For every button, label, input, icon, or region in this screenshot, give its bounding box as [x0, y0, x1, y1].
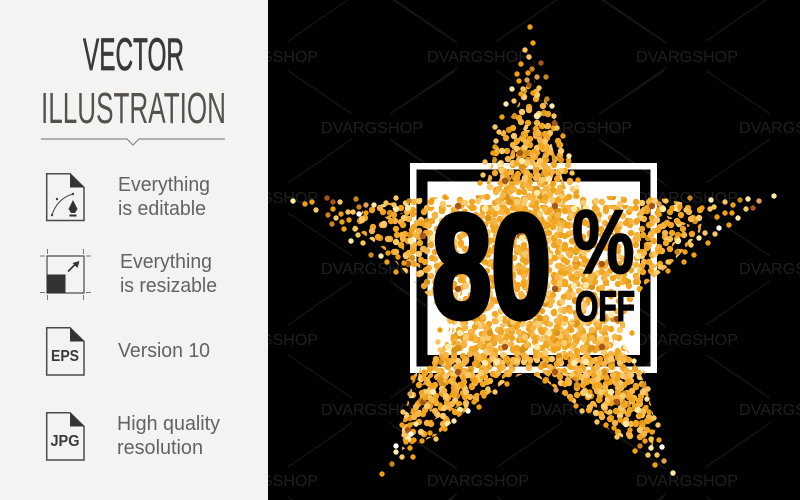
watermark: DVARGSHOP text: DVARGSHOP	[530, 120, 632, 137]
text: version 10: Version 10	[118, 339, 210, 362]
watermark: DVARGSHOP text: DVARGSHOP	[217, 473, 318, 490]
icon: resize square	[40, 249, 91, 300]
icon: JPG file	[47, 412, 84, 460]
watermark: DVARGSHOP text: DVARGSHOP	[530, 402, 632, 419]
headline: 80: 80	[432, 185, 551, 349]
gold glitter star	[280, 20, 787, 497]
text: everything is editable: Everything	[118, 173, 210, 196]
watermark: DVARGSHOP text: DVARGSHOP	[321, 261, 423, 278]
text: high quality resolution	[117, 412, 221, 459]
star tips: scattered dots	[293, 27, 774, 474]
watermark: DVARGSHOP text	[217, 49, 800, 490]
star centre band	[382, 205, 690, 290]
watermark: DVARGSHOP text: DVARGSHOP	[321, 120, 423, 137]
star body: glitter layers	[352, 80, 704, 450]
watermark: DVARGSHOP text: DVARGSHOP	[217, 332, 318, 349]
watermark lines	[268, 0, 800, 500]
title: ILLUSTRATION: ILLUSTRATION	[41, 84, 226, 133]
title: VECTOR: VECTOR	[83, 29, 184, 80]
watermark: DVARGSHOP text: DVARGSHOP	[217, 49, 318, 66]
star dense zones: layered glitter	[422, 130, 645, 415]
headline: OFF: OFF	[575, 283, 635, 331]
text: everything is resizable: is resizable	[120, 274, 217, 297]
star accents: brown and pale dots	[392, 101, 682, 442]
text: everything is resizable	[120, 250, 217, 297]
watermark: DVARGSHOP text: DVARGSHOP	[636, 473, 738, 490]
headline: percent sign: %	[572, 193, 634, 293]
text: everything is editable: is editable	[118, 197, 206, 220]
icon: editable file with pen	[47, 174, 84, 220]
panel: dark background	[268, 0, 800, 500]
watermark: DVARGSHOP text: DVARGSHOP	[427, 49, 529, 66]
icon: EPS file: EPS	[51, 348, 79, 365]
star core: denser glitter	[410, 125, 650, 425]
icon: EPS file	[47, 328, 84, 375]
watermark: DVARGSHOP text: DVARGSHOP	[427, 473, 529, 490]
text: high quality resolution: resolution	[117, 436, 203, 459]
text: everything is resizable: Everything	[120, 250, 212, 273]
text: everything is editable	[118, 173, 210, 220]
watermark: DVARGSHOP text: DVARGSHOP	[636, 190, 738, 207]
icon: JPG file: JPG	[50, 433, 80, 450]
watermark: DVARGSHOP text: DVARGSHOP	[636, 332, 738, 349]
text: high quality resolution: High quality	[117, 412, 221, 435]
divider with chevron	[41, 139, 225, 145]
white square frame	[410, 163, 657, 373]
watermark: DVARGSHOP text: DVARGSHOP	[217, 190, 318, 207]
watermark: DVARGSHOP text: DVARGSHOP	[321, 402, 423, 419]
watermark: DVARGSHOP text: DVARGSHOP	[636, 49, 738, 66]
panel: sidebar	[0, 0, 268, 500]
